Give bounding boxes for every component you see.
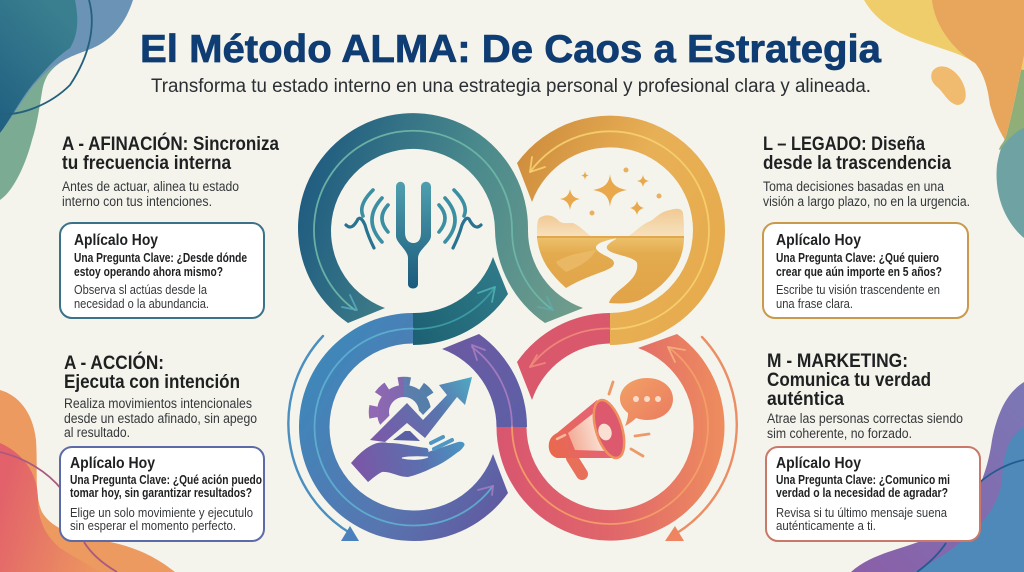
- heading: Marketing: M - MARKETING:: [767, 351, 908, 372]
- panel: M - Marketing: [766, 351, 980, 541]
- description: Legado: visión a largo plazo, no en la urgencia.: [763, 194, 970, 210]
- description: Afinación: Antes de actuar, alinea tu estado: [62, 179, 239, 195]
- description: Legado: Toma decisiones basadas en una: [763, 179, 944, 195]
- title: El Método ALMA: De Caos a Estrategia: [140, 28, 881, 71]
- ring: red and orange band: [496, 334, 724, 541]
- description: Acción: desde un estado afinado, sin apego: [64, 411, 257, 427]
- callout: Aplícalo Hoy Marketing: verdad o la necesidad de agradar?: [776, 485, 948, 500]
- heading: Marketing: Comunica tu verdad: [767, 370, 931, 391]
- ring: purple band: [442, 334, 527, 427]
- callout: Aplícalo Hoy Marketing: auténticamente a ti.: [776, 518, 876, 533]
- description: Marketing: [767, 411, 963, 442]
- callout: Aplícalo Hoy Marketing: Una Pregunta Clave: ¿Comunico mi: [776, 472, 950, 487]
- callout: Aplícalo Hoy Acción: Una Pregunta Clave: ¿Qué ación puedo: [70, 472, 262, 487]
- callout: Aplícalo Hoy Legado: una frase clara.: [776, 296, 853, 311]
- callout: Aplícalo Hoy Afinación: Observa sl actúas desde la: [74, 282, 208, 297]
- description: Acción: Realiza movimientos intencionales: [64, 396, 252, 412]
- subtitle: Transforma tu estado interno en una estrategia personal y profesional clara y alineada.: [151, 76, 871, 97]
- heading: Acción: A - ACCIÓN:: [64, 352, 164, 374]
- icon: megaphone and speech bubble: [549, 378, 673, 474]
- callout: Aplícalo Hoy Acción: sin esperar el momento perfecto.: [70, 518, 236, 533]
- ring: gold band: [517, 116, 725, 345]
- heading: Legado: [763, 134, 951, 174]
- heading: Afinación: A - AFINACIÓN: Sincroniza: [62, 133, 279, 155]
- callout: Aplícalo Hoy Legado: Aplícalo Hoy: [776, 232, 861, 249]
- ring: red upper band: [517, 313, 610, 400]
- callout: Aplícalo Hoy Afinación: necesidad o la abundancia.: [74, 296, 209, 311]
- description: Legado: [763, 179, 970, 210]
- icon: tuning fork: [346, 182, 481, 288]
- heading: Acción: [64, 352, 240, 393]
- heading: Afinación: tu frecuencia interna: [62, 153, 231, 174]
- description: Afinación: interno con tus intenciones.: [62, 194, 212, 210]
- ring: blue band: [299, 313, 508, 541]
- ALMA cycle diagram: [288, 113, 737, 541]
- icon: stars over landscape: [537, 168, 684, 304]
- description: Acción: al resultado.: [64, 425, 130, 441]
- icon: gear, growth arrow and hand: [351, 377, 472, 482]
- callout: Aplícalo Hoy Legado: Una Pregunta Clave: ¿Qué quiero: [776, 250, 939, 265]
- callout: Aplícalo Hoy Afinación: Aplícalo Hoy: [74, 232, 158, 249]
- arrow: outer left: [288, 336, 359, 541]
- heading: Marketing: auténtica: [767, 389, 844, 410]
- ring: teal S band: [298, 113, 583, 323]
- arrow: outer right: [665, 337, 737, 541]
- heading: Afinación: [62, 133, 279, 174]
- description: Marketing: sim coherente, no forzado.: [767, 426, 912, 442]
- callout: Aplícalo Hoy Acción: Aplícalo Hoy: [70, 455, 155, 472]
- callout: Aplícalo Hoy Marketing: Revisa si tu último mensaje suena: [776, 505, 948, 520]
- callout: Aplícalo Hoy Afinación: estoy operando ahora mismo?: [74, 264, 223, 279]
- decorative blobs: top right: [864, 0, 1024, 238]
- callout: Aplícalo Hoy Marketing: [766, 447, 980, 541]
- heading: Marketing: [767, 351, 931, 410]
- callout: Aplícalo Hoy Afinación: Una Pregunta Clave: ¿Desde dónde: [74, 250, 247, 265]
- callout: Aplícalo Hoy Acción: [60, 447, 264, 541]
- decorative blobs: bottom right: [851, 382, 1024, 572]
- description: Acción: [64, 396, 257, 441]
- decorative blobs: bottom left: [0, 390, 175, 572]
- callout: Aplícalo Hoy Acción: Elige un solo movimiente y ejecutulo: [70, 505, 253, 520]
- description: Afinación: [62, 179, 239, 210]
- decorative blobs: top left: [0, 0, 133, 200]
- panel: A - Afinación: [60, 133, 279, 318]
- heading: Acción: Ejecuta con intención: [64, 372, 240, 393]
- callout: Aplícalo Hoy Legado: [763, 223, 968, 318]
- callout: Aplícalo Hoy Afinación: [60, 223, 264, 318]
- description: Marketing: Atrae las personas correctas siendo: [767, 411, 963, 427]
- heading: Legado: desde la trascendencia: [763, 153, 951, 174]
- callout: Aplícalo Hoy Acción: tomar hoy, sin garantizar resultados?: [70, 485, 252, 500]
- heading: Legado: L – LEGADO: Diseña: [763, 134, 925, 155]
- panel: L - Legado: [763, 134, 970, 318]
- callout: Aplícalo Hoy Legado: Escribe tu visión trascendente en: [776, 282, 940, 297]
- callout: Aplícalo Hoy Legado: crear que aún importe en 5 años?: [776, 264, 942, 279]
- callout: Aplícalo Hoy Marketing: Aplícalo Hoy: [776, 455, 861, 472]
- panel: A - Acción: [60, 352, 264, 541]
- ring: teal lower band: [413, 257, 508, 345]
